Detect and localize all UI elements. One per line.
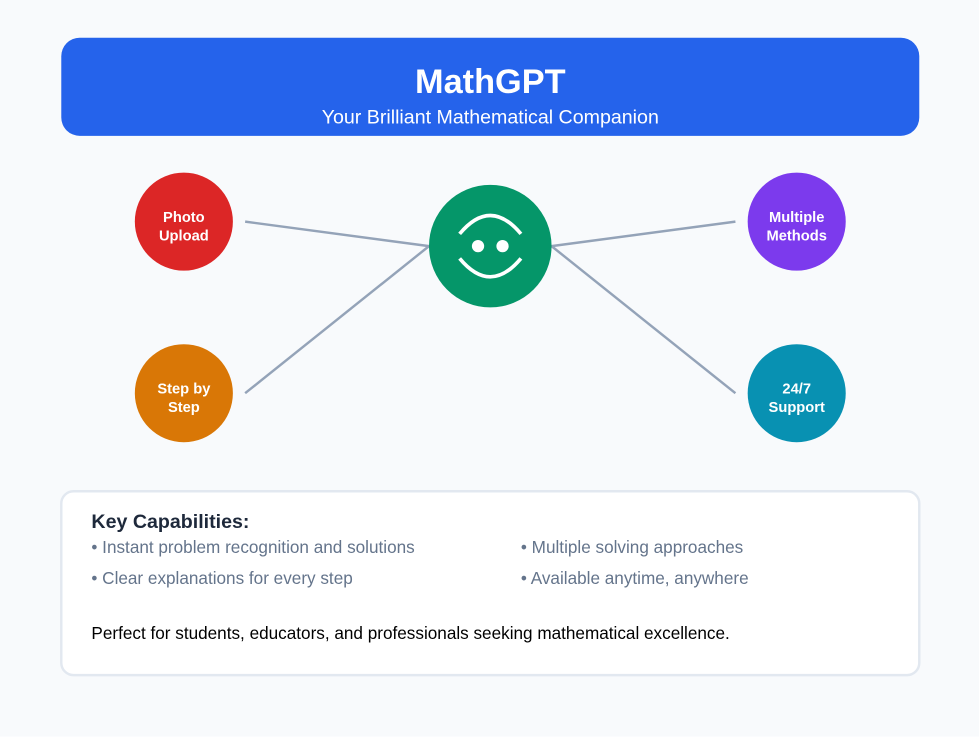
node: step by step: Step: [168, 400, 200, 416]
node: photo upload: Photo: [163, 210, 205, 226]
capability list: • Multiple solving approaches: [521, 537, 743, 557]
node: multiple methods: Multiple: [769, 210, 824, 226]
node: step by step: Step by: [157, 381, 211, 397]
node: step by step: [135, 344, 233, 442]
node: photo upload: Upload: [159, 228, 209, 244]
subtitle: Your Brilliant Mathematical Companion: [322, 107, 659, 129]
panel: key capabilities: [61, 491, 919, 675]
capability list: • Clear explanations for every step: [91, 568, 353, 588]
closing statement: Perfect for students, educators, and professionals seeking mathematical excellence.: [91, 623, 730, 643]
node: photo upload: [135, 173, 233, 271]
panel heading: Key Capabilities:: [91, 511, 249, 533]
connector lines: [245, 222, 735, 393]
node: multiple methods: Methods: [767, 228, 827, 244]
capability list: • Instant problem recognition and solutions: [91, 537, 415, 557]
node: multiple methods: [748, 173, 846, 271]
node: 24/7 support: Support: [769, 400, 825, 416]
header banner: [61, 38, 919, 136]
node: 24/7 support: 24/7: [782, 381, 811, 397]
capability list: • Available anytime, anywhere: [521, 568, 749, 588]
title: MathGPT: [415, 63, 566, 101]
central icon: smiling face: [429, 185, 552, 307]
node: 24/7 support: [748, 344, 846, 442]
capability list: [91, 537, 749, 588]
